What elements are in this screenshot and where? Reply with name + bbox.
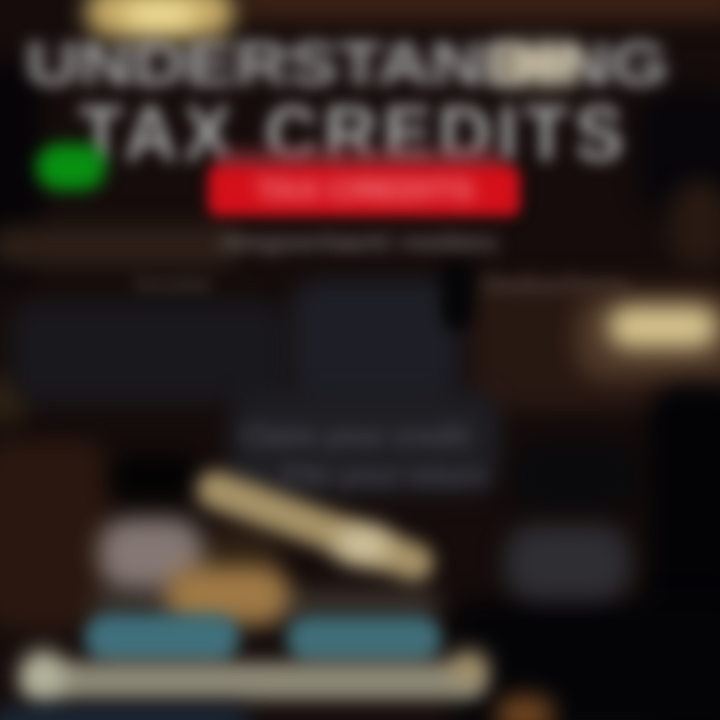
highlight on title [492, 46, 582, 82]
dark area right of centre [510, 440, 640, 510]
grey text block right [505, 525, 630, 601]
orange hand [165, 566, 290, 624]
dark desk area bottom right [450, 600, 720, 720]
text line lower: File your return [282, 460, 488, 491]
brown shadow under pen [190, 530, 280, 590]
navy book base [0, 708, 250, 720]
pen highlight [335, 528, 390, 562]
figure shadow [442, 260, 472, 330]
dark shadow behind pen [110, 455, 200, 500]
red banner top haze [215, 150, 505, 180]
teal book right [286, 616, 442, 662]
dark panel left [10, 300, 290, 405]
title [17, 30, 676, 177]
book stack cream [22, 662, 487, 700]
lamp: top left [85, 0, 235, 38]
title line two: TAX CREDITS [78, 89, 630, 177]
pen [191, 465, 439, 587]
figure base [230, 390, 500, 495]
lamp core: top left [125, 2, 195, 28]
banner text: TAX CREDITS [256, 174, 474, 207]
paper left [98, 518, 203, 590]
book highlight left [22, 650, 64, 700]
icon: green badge [36, 144, 106, 190]
desk orange bottom [495, 695, 555, 720]
grey base under books [90, 590, 440, 620]
caption left: Income [135, 272, 212, 297]
figure upper body [290, 280, 460, 405]
caption right: Deductions [482, 269, 630, 299]
book corner right [450, 650, 488, 686]
title line one: UNDERSTANDING [26, 30, 668, 99]
central figure [224, 261, 505, 502]
lamp: right [608, 306, 718, 348]
red banner [208, 166, 520, 216]
text line upper: Claim your credit [241, 420, 469, 451]
right lamp glow [575, 295, 720, 380]
teal book left [84, 614, 240, 662]
subtitle text: Important notes [222, 226, 498, 257]
dark figure right [650, 385, 720, 720]
